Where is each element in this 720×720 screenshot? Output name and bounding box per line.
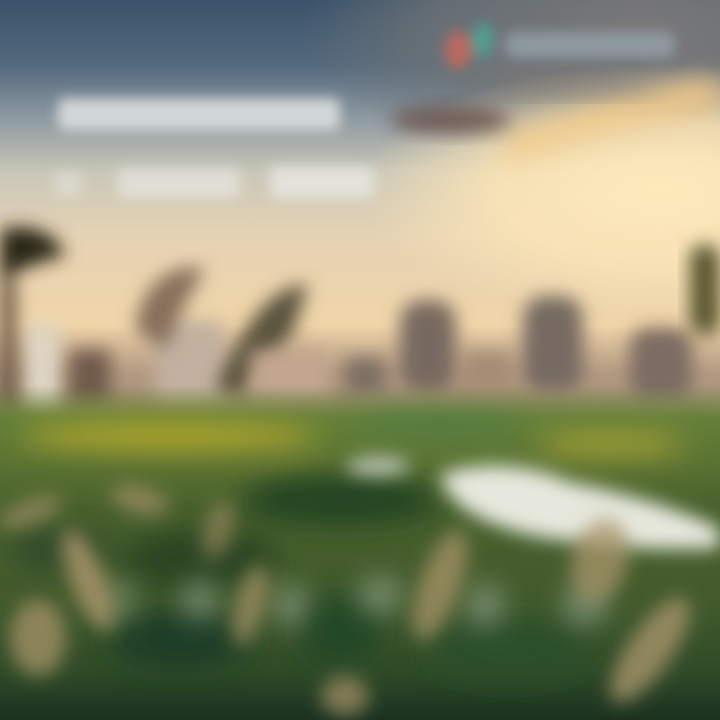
ground: green field: [0, 385, 720, 720]
foreground: dark foliage: [110, 595, 590, 680]
palm: right edge tree: [690, 245, 720, 335]
foreground: pale reflections between the reeds: [108, 577, 607, 627]
logo: illegible coloured mark and wordmark: [445, 23, 675, 69]
title: illegible blurred heading bars: [54, 98, 374, 198]
skyline: blurred buildings and palms: [0, 267, 720, 420]
palm: left foreground tree: [0, 227, 65, 415]
clouds and sunset glow: [300, 0, 720, 320]
field highlights: yellow grass: [10, 416, 685, 590]
water: reflective pond: [346, 457, 720, 549]
reeds: tan grass plumes: [0, 479, 704, 716]
